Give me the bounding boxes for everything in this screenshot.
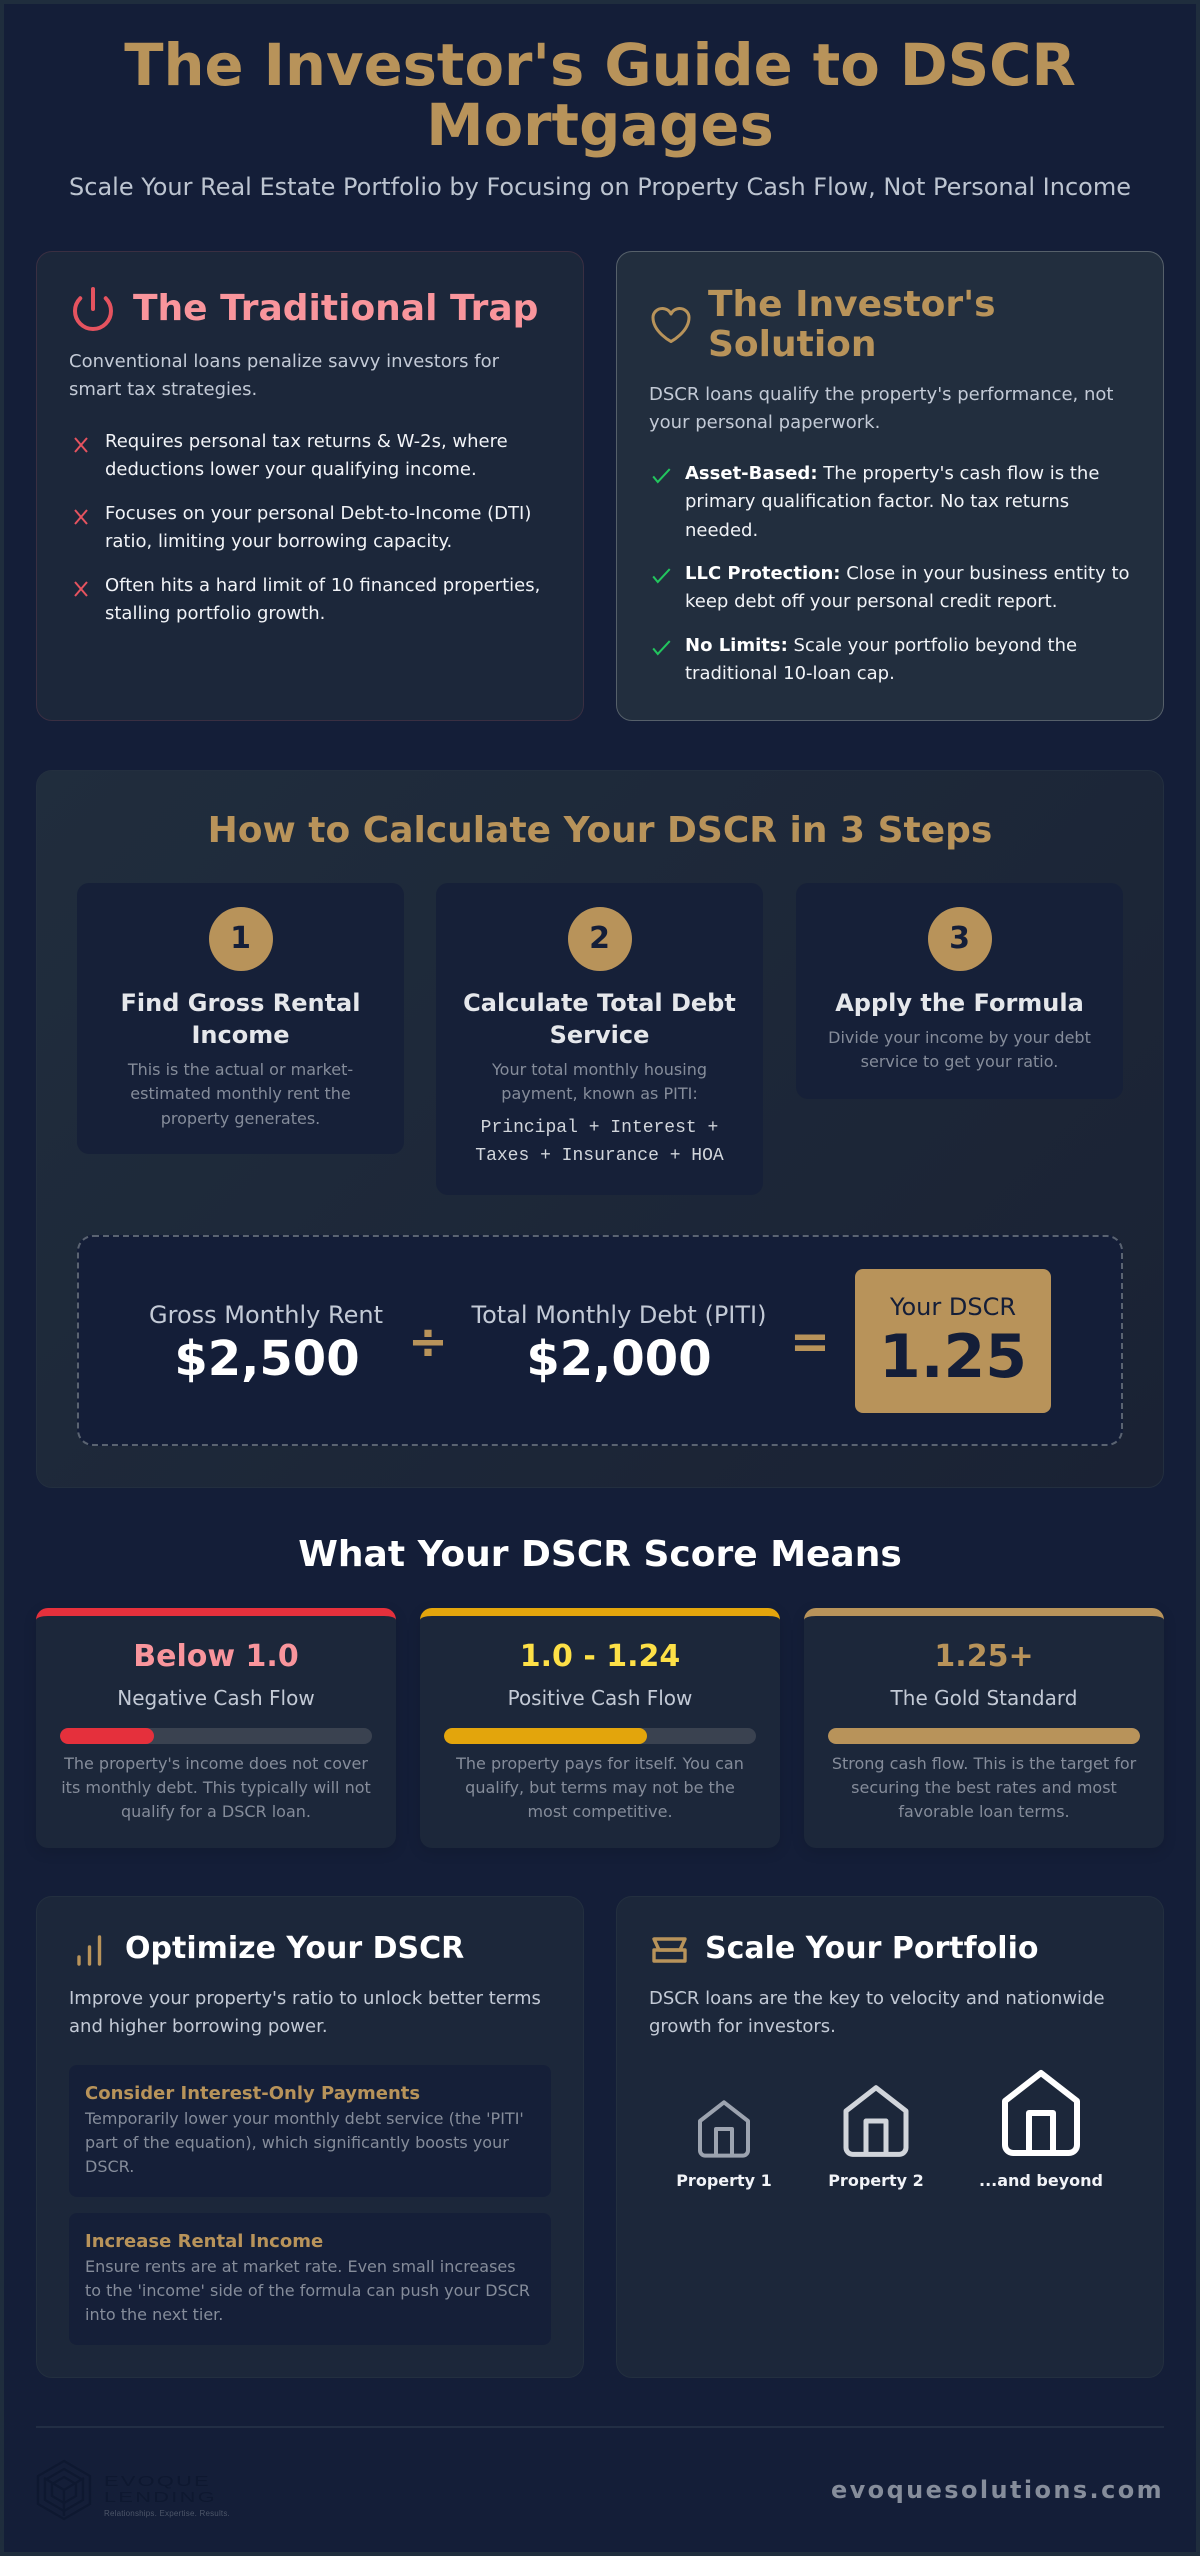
logo name — [104, 2473, 217, 2506]
heading: the traditional trap: The Traditional Trap — [133, 288, 538, 329]
panel: how to calculate — [36, 770, 1164, 1488]
subtitle: Scale Your Real Estate Portfolio by Focusing on Property Cash Flow, Not Personal Income — [69, 173, 1131, 201]
step description: Your total monthly housing payment, known as PITI: — [492, 1060, 707, 1103]
intro text — [69, 351, 499, 400]
intro text: your personal paperwork. — [649, 412, 880, 433]
list item: LLC Protection: Close in your business entity to — [685, 563, 1130, 584]
tier: below 1.0 — [36, 1608, 396, 1848]
list item: Often hits a hard limit of 10 financed properties, — [105, 575, 540, 596]
tier: 1.25+ — [804, 1608, 1164, 1848]
tier value: Below 1.0 — [133, 1639, 299, 1674]
icon: house medium — [844, 2085, 908, 2157]
heading: how to calculate: How to Calculate Your DSCR in 3 Steps — [208, 810, 992, 851]
icon: bars — [77, 1935, 102, 1966]
number badge: 1 — [230, 921, 251, 956]
logo name: LENDING — [104, 2489, 217, 2506]
footer divider — [36, 2426, 1164, 2428]
step 2 — [436, 883, 763, 1195]
intro text — [69, 1988, 541, 2037]
heading: the investor's solution — [708, 284, 996, 365]
logo name: EVOQUE — [104, 2473, 211, 2490]
website url: evoquesolutions.com — [831, 2476, 1164, 2504]
panel: optimize your DSCR — [36, 1896, 584, 2378]
number badge: 3 — [949, 921, 970, 956]
list item — [685, 563, 1130, 612]
operator: equals: = — [790, 1314, 830, 1370]
list item: keep debt off your personal credit report. — [685, 591, 1057, 612]
label: total monthly debt: Total Monthly Debt (PITI) — [472, 1301, 766, 1329]
tier name: Positive Cash Flow — [508, 1686, 692, 1710]
list item: needed. — [685, 520, 758, 541]
tier: 1.0 - 1.24 — [420, 1608, 780, 1848]
intro text: Improve your property's ratio to unlock better terms — [69, 1988, 541, 2009]
label: property 1: Property 1 — [676, 2171, 772, 2190]
heading: the investor's solution: The Investor's — [708, 284, 996, 325]
icon: house small — [698, 2100, 750, 2158]
list item — [105, 431, 508, 480]
step title: Find Gross Rental Income — [121, 989, 360, 1049]
intro text — [649, 384, 1113, 433]
tier name: Negative Cash Flow — [117, 1686, 315, 1710]
icon: check — [652, 568, 670, 584]
PITI formula: Taxes + Insurance + HOA — [475, 1146, 724, 1166]
tip text — [84, 2109, 524, 2176]
tier description — [61, 1754, 371, 1821]
intro text: growth for investors. — [649, 2016, 836, 2037]
result box — [855, 1269, 1051, 1413]
icon: archive tray — [652, 1937, 687, 1963]
number badge — [928, 907, 992, 971]
tier description: qualify for a DSCR loan. — [121, 1802, 311, 1821]
formula box — [77, 1235, 1123, 1446]
list item: deductions lower your qualifying income. — [105, 459, 477, 480]
tier description — [456, 1754, 744, 1821]
list item — [105, 575, 540, 624]
icon: check — [652, 468, 670, 484]
tip text: to the 'income' side of the formula can push your DSCR — [85, 2281, 530, 2300]
tier description: its monthly debt. This typically will not — [61, 1778, 371, 1797]
step description: Divide your income by your debt service to get your ratio. — [828, 1028, 1091, 1071]
list item: Focuses on your personal Debt-to-Income (DTI) — [105, 503, 531, 524]
title: The Investor's Guide to DSCR Mortgages — [124, 32, 1076, 159]
list item: primary qualification factor. No tax returns — [685, 491, 1069, 512]
tip text — [85, 2257, 530, 2324]
icon: heart — [652, 307, 690, 343]
label: property 2: Property 2 — [828, 2171, 924, 2190]
tip title: Increase Rental Income — [85, 2231, 323, 2252]
icon: x — [74, 581, 88, 597]
progress bar — [828, 1728, 1140, 1744]
icon: house large — [1002, 2070, 1080, 2156]
value: rent: $2,500 — [174, 1331, 360, 1387]
number badge — [208, 907, 272, 971]
value: debt: $2,000 — [526, 1331, 712, 1387]
tip: rental income — [69, 2213, 551, 2345]
step 1 — [77, 883, 404, 1154]
tip text: Ensure rents are at market rate. Even small increases — [85, 2257, 516, 2276]
tier description: most competitive. — [527, 1802, 673, 1821]
step description: This is the actual or market-estimated monthly rent the property generates. — [128, 1060, 353, 1128]
number badge: 2 — [589, 921, 610, 956]
tip: interest-only — [69, 2065, 551, 2197]
logo mark — [39, 2460, 89, 2520]
list item: Asset-Based: The property's cash flow is the — [685, 463, 1099, 484]
panel: the traditional trap — [36, 251, 584, 721]
icon: x — [74, 437, 88, 453]
list item — [685, 463, 1099, 541]
icon: power — [73, 287, 113, 331]
list item: stalling portfolio growth. — [105, 603, 325, 624]
step title: Calculate Total Debt Service — [463, 989, 736, 1049]
list item: traditional 10-loan cap. — [685, 663, 895, 684]
label: gross monthly rent: Gross Monthly Rent — [149, 1301, 383, 1329]
progress bar — [60, 1728, 372, 1744]
tier description: securing the best rates and most — [851, 1778, 1117, 1797]
list item — [685, 635, 1077, 684]
tip text: into the next tier. — [85, 2305, 223, 2324]
panel: the investor's solution — [616, 251, 1164, 721]
heading: the investor's solution: Solution — [708, 324, 877, 365]
heading: score means: What Your DSCR Score Means — [298, 1534, 902, 1575]
tier description — [832, 1754, 1136, 1821]
result label: Your DSCR — [890, 1293, 1016, 1321]
list item: ratio, limiting your borrowing capacity. — [105, 531, 452, 552]
intro text: smart tax strategies. — [69, 379, 257, 400]
list item: No Limits: Scale your portfolio beyond the — [685, 635, 1077, 656]
intro text: and higher borrowing power. — [69, 2016, 328, 2037]
tip text: Temporarily lower your monthly debt service (the 'PITI' — [85, 2109, 524, 2128]
heading: scale: Scale Your Portfolio — [705, 1931, 1038, 1966]
PITI formula — [475, 1118, 724, 1166]
panel: scale your portfolio — [616, 1896, 1164, 2378]
list item — [105, 503, 531, 552]
step 3 — [796, 883, 1123, 1099]
tier description: Strong cash flow. This is the target for — [832, 1754, 1136, 1773]
tier value: 1.0 - 1.24 — [520, 1639, 680, 1674]
tip text: part of the equation), which significantly boosts your — [85, 2133, 509, 2152]
intro text: Conventional loans penalize savvy investors for — [69, 351, 499, 372]
icon: x — [74, 509, 88, 525]
tier name: The Gold Standard — [891, 1686, 1077, 1710]
icon: check — [652, 640, 670, 656]
heading: optimize: Optimize Your DSCR — [125, 1931, 464, 1966]
step title: Apply the Formula — [835, 989, 1084, 1017]
intro text — [649, 1988, 1105, 2037]
label: and beyond: ...and beyond — [979, 2171, 1103, 2190]
logo: evoque lending — [39, 2460, 230, 2520]
intro text: DSCR loans qualify the property's performance, not — [649, 384, 1113, 405]
operator: divide: ÷ — [408, 1314, 448, 1370]
result value: 1.25 — [879, 1322, 1027, 1392]
tier description: qualify, but terms may not be the — [465, 1778, 735, 1797]
tip title: Consider Interest-Only Payments — [85, 2083, 420, 2104]
list item: Requires personal tax returns & W-2s, where — [105, 431, 508, 452]
number badge — [568, 907, 632, 971]
progress bar — [444, 1728, 756, 1744]
tip text: DSCR. — [85, 2157, 134, 2176]
intro text: DSCR loans are the key to velocity and nationwide — [649, 1988, 1105, 2009]
tier value: 1.25+ — [934, 1639, 1034, 1674]
tier description: favorable loan terms. — [898, 1802, 1070, 1821]
logo tagline: Relationships. Expertise. Results. — [104, 2509, 230, 2518]
tier description: The property's income does not cover — [64, 1754, 368, 1773]
tier description: The property pays for itself. You can — [456, 1754, 744, 1773]
PITI formula: Principal + Interest + — [481, 1118, 718, 1138]
